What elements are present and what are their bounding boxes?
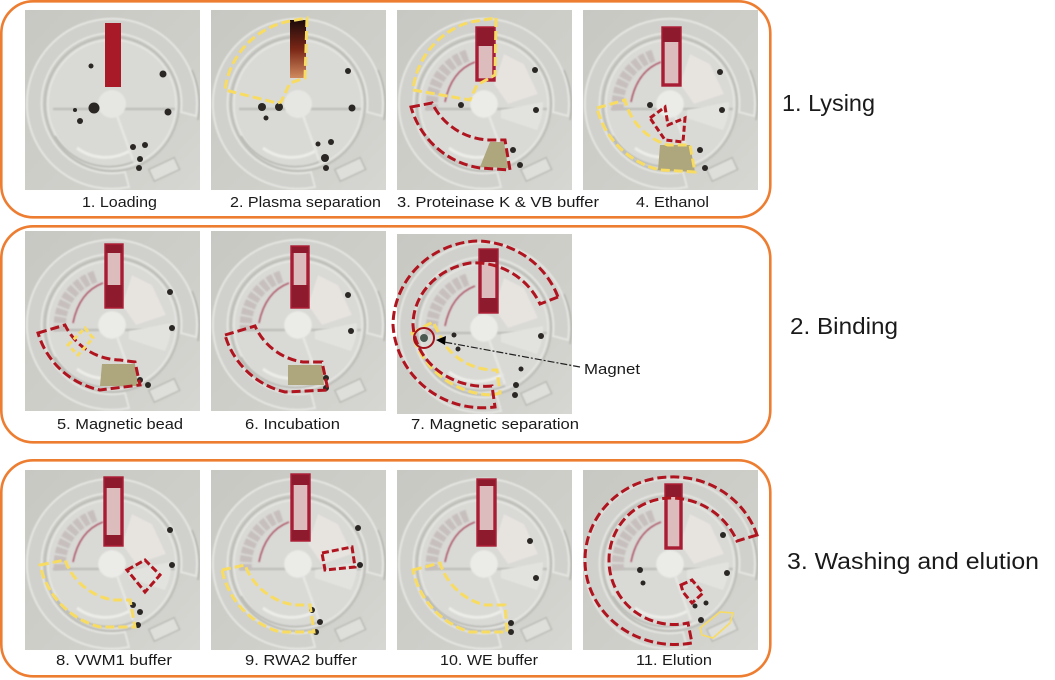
highlight: yellow elution chamber [700, 612, 733, 638]
step 1: loading [25, 10, 200, 211]
highlight: yellow wash zone [40, 560, 135, 627]
highlight: yellow plasma zone [225, 18, 307, 103]
highlight: yellow wash zone [222, 565, 314, 632]
highlight: yellow sample zone [413, 18, 496, 100]
step 6: incubation: 6. Incubation [245, 416, 340, 433]
highlight: red buffer zone [411, 103, 510, 170]
step 8: VWM1 buffer [25, 470, 200, 669]
step 8: VWM1 buffer: 8. VWM1 buffer [56, 652, 172, 669]
step 7: magnetic separation: 7. Magnetic separation [411, 416, 579, 433]
step 7: magnetic separation [393, 234, 641, 433]
highlight: red ethanol chamber [650, 107, 685, 142]
step 3: proteinase K and VB buffer: 3. Proteinase K & VB buffer [397, 194, 599, 211]
step 11: elution: 11. Elution [636, 652, 712, 669]
step 2: plasma separation [211, 10, 386, 211]
highlight: yellow bead chamber [68, 328, 93, 355]
highlight: yellow sector [597, 100, 695, 172]
step 1: loading: 1. Loading [82, 194, 157, 211]
highlight: red wash chamber [322, 547, 355, 570]
icon: magnet spot [414, 328, 434, 348]
step 10: WE buffer [397, 470, 572, 669]
highlight: red outer channel [585, 477, 757, 645]
highlight: red incubation zone [225, 326, 328, 392]
step 5: magnetic bead: 5. Magnetic bead [57, 416, 183, 433]
arrow: magnet pointer [436, 336, 580, 367]
heading: 2. Binding: 2. Binding [790, 313, 898, 339]
step 10: WE buffer: 10. WE buffer [440, 652, 538, 669]
highlight: yellow waste zone [412, 322, 500, 395]
step 3: proteinase K and VB buffer [397, 10, 599, 211]
highlight: red mix zone [38, 325, 140, 390]
step 9: RWA2 buffer [211, 470, 386, 669]
highlight: red wash chamber [127, 560, 160, 592]
heading: 3. Washing and elution: 3. Washing and elution [787, 548, 1039, 574]
step 4: ethanol: 4. Ethanol [636, 194, 709, 211]
step 6: incubation [211, 231, 386, 433]
step 4: ethanol [583, 10, 758, 211]
panel: lysing [1, 1, 770, 217]
step 2: plasma separation: 2. Plasma separation [230, 194, 381, 211]
step 9: RWA2 buffer: 9. RWA2 buffer [245, 652, 357, 669]
highlight: yellow wash zone [413, 563, 507, 632]
heading: 1. Lysing: 1. Lysing [782, 90, 875, 116]
panel: binding [1, 226, 770, 442]
panel: washing and elution [1, 460, 770, 676]
step 11: elution [583, 470, 758, 669]
highlight: red outer channel [393, 241, 558, 408]
label: magnet: Magnet [584, 361, 641, 378]
highlight: red small chamber [681, 580, 703, 603]
step 5: magnetic bead [25, 231, 200, 433]
